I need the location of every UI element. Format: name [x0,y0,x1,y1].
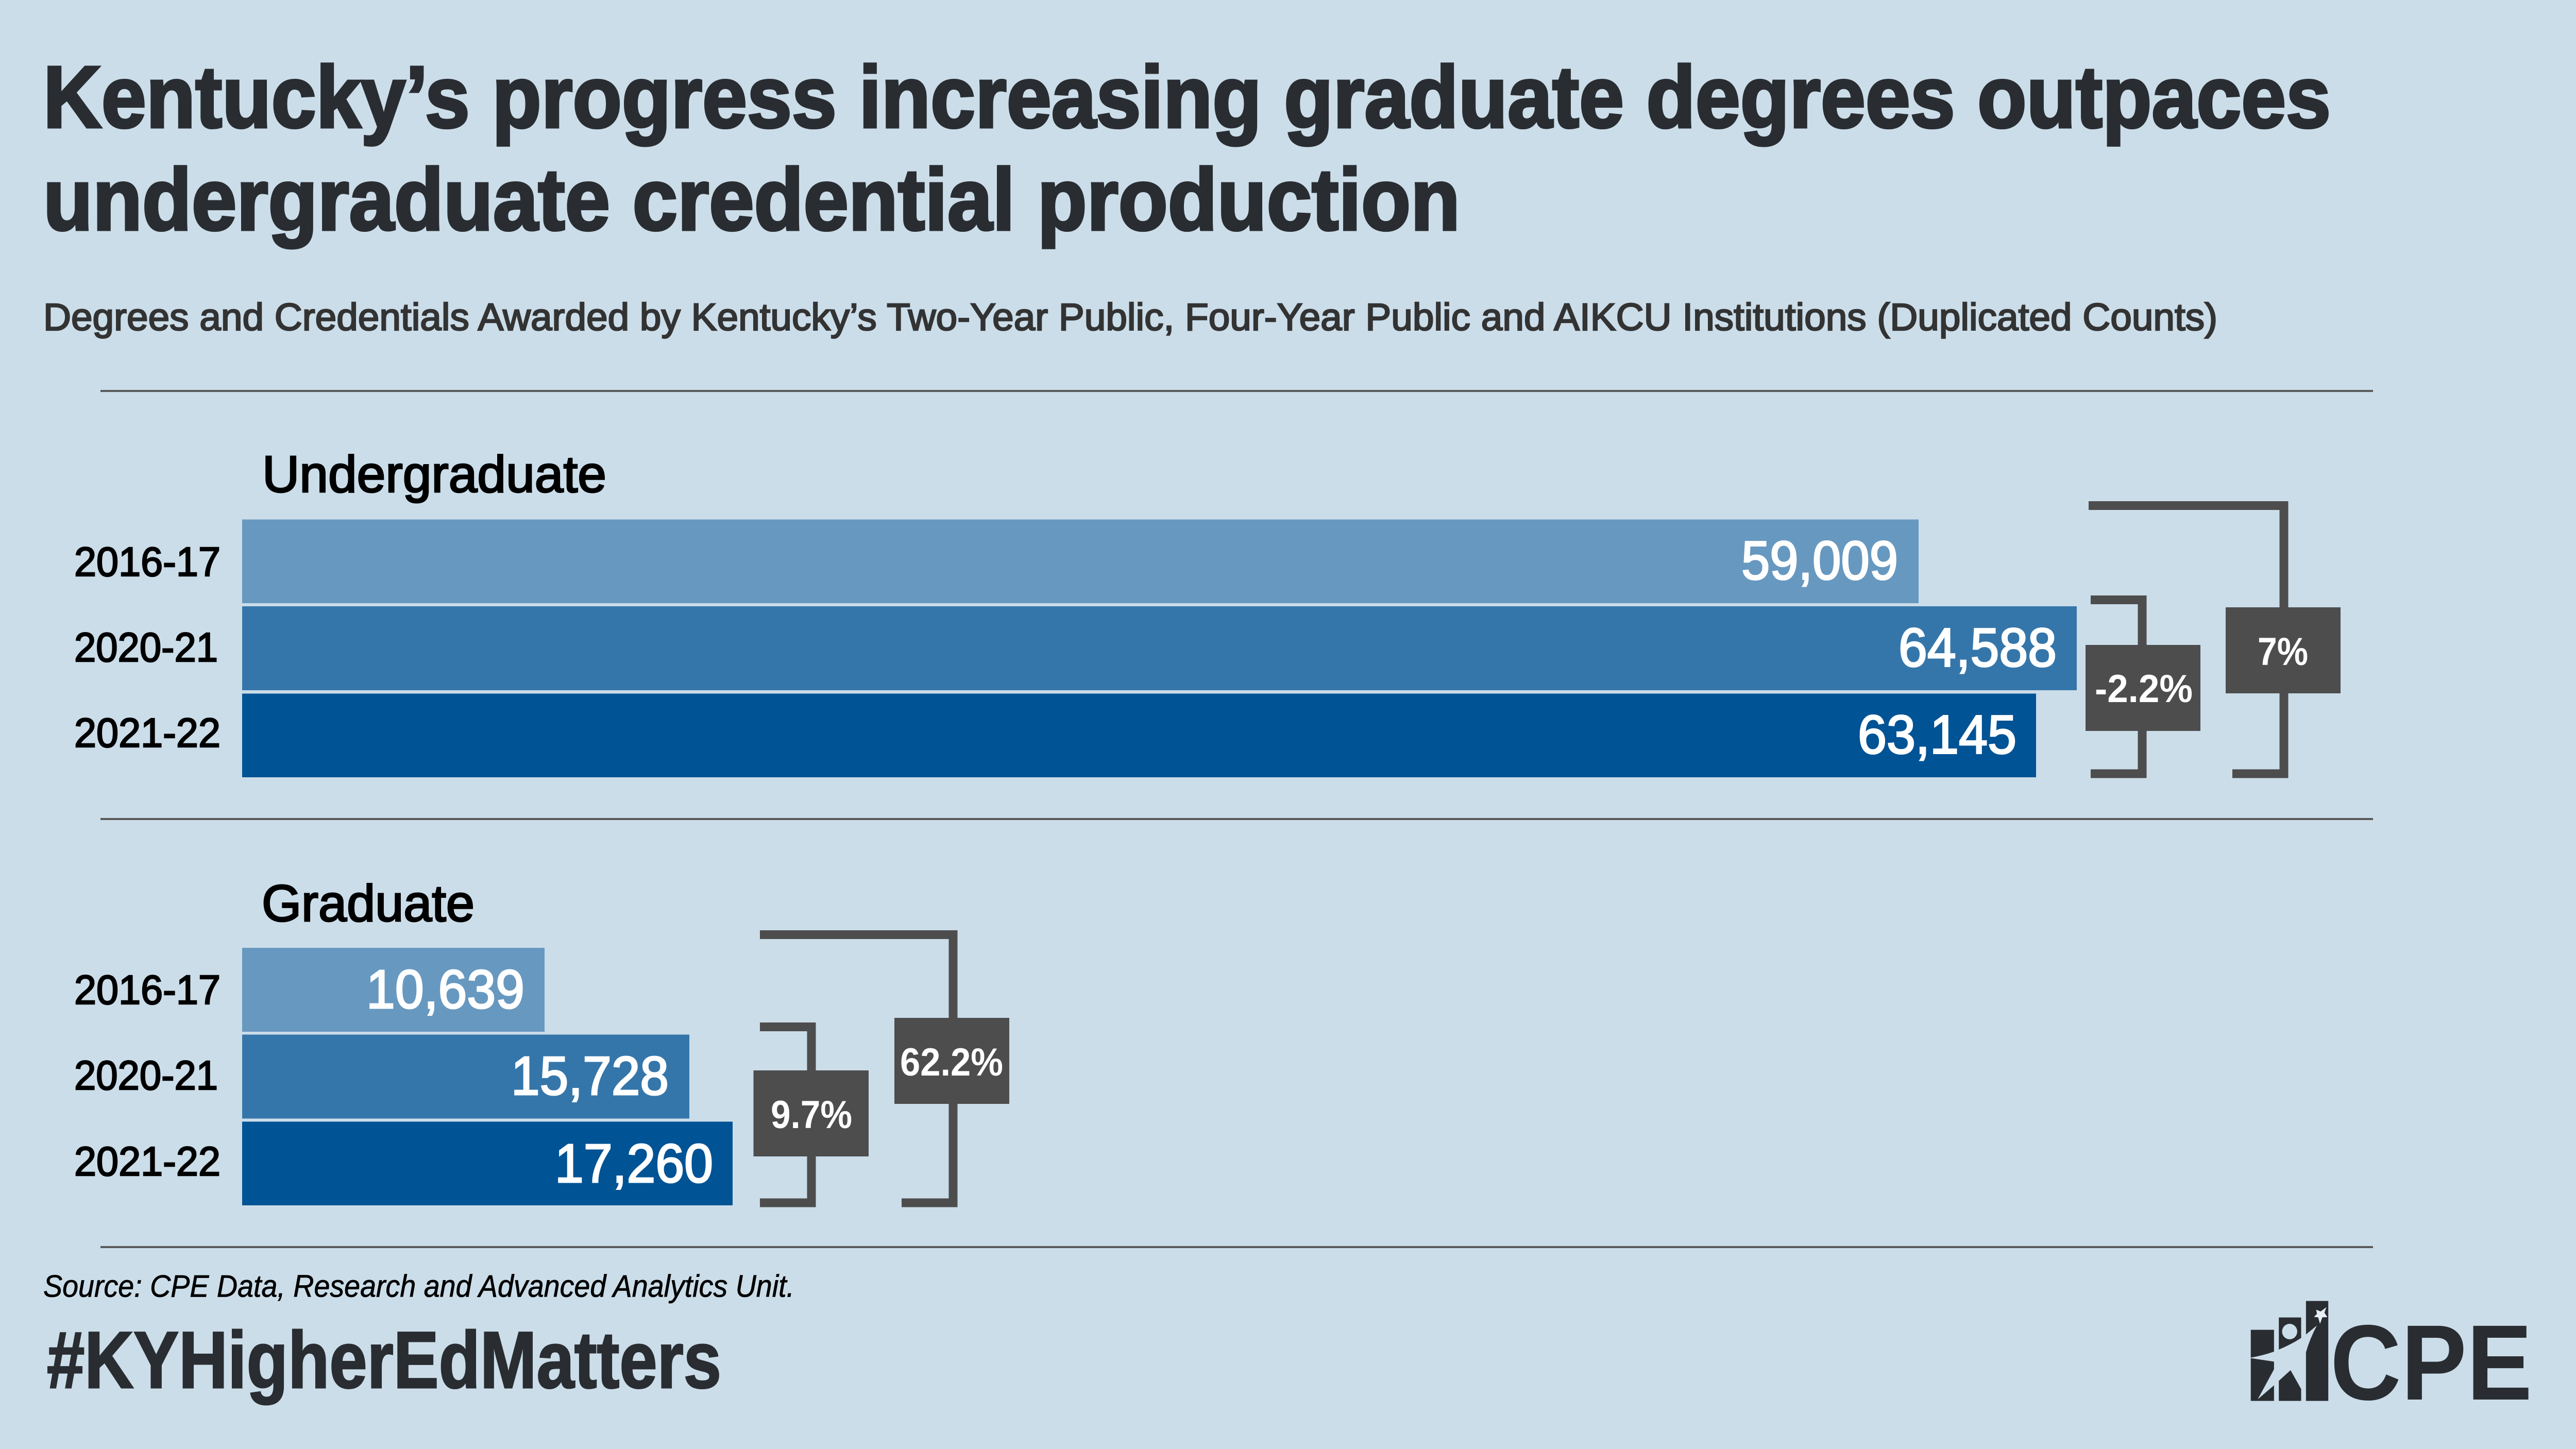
bar: undergraduate 2021-22 [242,693,2036,777]
value: 63,145: 63,145 [1858,705,2016,765]
callout: 7%: 7% [2258,630,2308,674]
bar: graduate 2020-21 [242,1034,689,1119]
bracket: 2020-21 to 2021-22 [760,1027,811,1203]
title: Kentucky’s progress increasing graduate degrees outpaces [43,48,2331,146]
logo wordmark: CPE [2330,1303,2532,1423]
value: 10,639: 10,639 [366,959,524,1020]
logo: CPE [2251,1301,2532,1423]
label: 2016-17: 2016-17 [74,539,221,585]
heading: graduate: Graduate [262,875,474,932]
bar: graduate 2016-17 [242,948,545,1032]
callout: 9.7%: 9.7% [771,1093,852,1137]
bar: graduate 2021-22 [242,1122,733,1205]
label: 2021-22: 2021-22 [74,1138,221,1184]
bar: undergraduate 2016-17 [242,519,1919,603]
callout: -2.2%: -2.2% [2095,667,2193,711]
value: 17,260: 17,260 [555,1133,713,1194]
value: 59,009: 59,009 [1741,531,1898,591]
label: 2016-17: 2016-17 [74,967,221,1013]
hashtag: #KYHigherEdMatters [47,1316,721,1405]
callout: -2.2% [2086,645,2200,731]
bracket: 2016-17 to 2021-22 [760,934,953,1203]
bracket: 2016-17 to 2021-22 [2089,506,2284,774]
bar: undergraduate 2020-21 [242,606,2077,690]
bracket: 2020-21 to 2021-22 [2091,600,2142,774]
panel: undergraduate [74,446,2341,777]
callout: 62.2%: 62.2% [900,1041,1003,1084]
value: 15,728: 15,728 [511,1046,669,1106]
heading: undergraduate: Undergraduate [262,446,606,503]
title [43,48,2331,249]
value: 64,588: 64,588 [1899,617,2057,678]
title: undergraduate credential production [43,151,1460,249]
subtitle: Degrees and Credentials Awarded by Kentucky’s Two-Year Public, Four-Year Public and AIKCU Institutions (Duplicated Counts) [43,296,2217,338]
callout: 62.2% [894,1018,1009,1104]
source note: Source: CPE Data, Research and Advanced Analytics Unit. [43,1269,794,1303]
label: 2020-21: 2020-21 [74,624,218,670]
label: 2020-21: 2020-21 [74,1052,218,1098]
icon: bars with reaching figure [2251,1301,2328,1401]
callout: 7% [2226,607,2341,693]
label: 2021-22: 2021-22 [74,710,221,756]
panel: graduate [74,875,1009,1205]
callout: 9.7% [753,1070,869,1156]
